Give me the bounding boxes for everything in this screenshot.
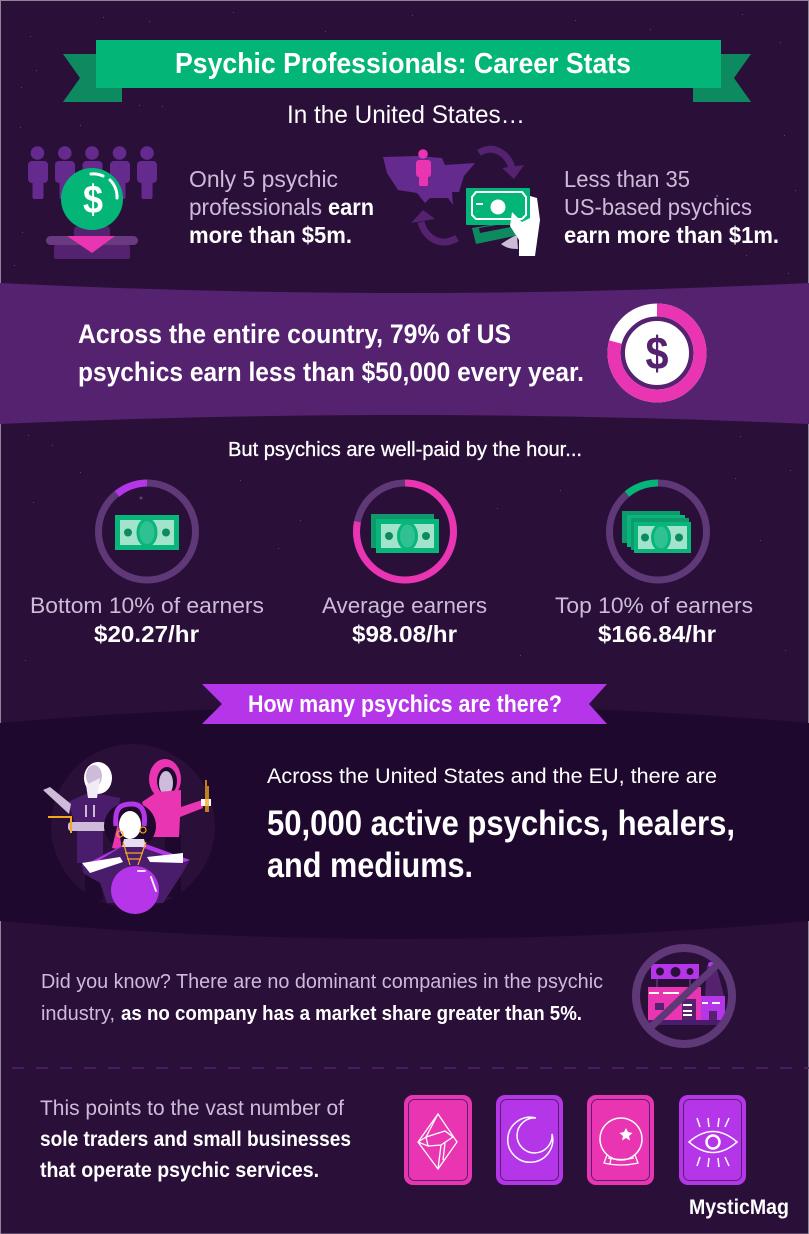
statement: 50,000 active psychics: 50,000 active psychics, healers, <box>267 804 735 843</box>
card: crystal ball <box>587 1095 654 1185</box>
text: only 5 psychic professionals: Only 5 psychic <box>189 166 338 192</box>
text: only 5 psychic professionals: earn <box>328 194 374 220</box>
text: only 5 psychic professionals <box>189 166 374 248</box>
stat: bottom 10 percent: Bottom 10% of earners <box>30 593 264 618</box>
statement: 50,000 active psychics: Across the United States and the EU, there are <box>267 765 717 788</box>
text: only 5 psychic professionals: professionals <box>189 194 322 220</box>
band statement: psychics earn less than $50,000 every year. <box>78 357 584 387</box>
text: less than 35 US-based psychics: earn more than $1m. <box>564 222 779 248</box>
stat: average earners: Average earners <box>322 593 487 618</box>
ring and bill icon <box>98 483 196 580</box>
panel: purple band 79 percent <box>0 283 809 424</box>
icon: five people with crystal ball <box>28 146 157 259</box>
ring and bills icon <box>610 483 706 580</box>
statement: 50,000 active psychics <box>267 765 735 885</box>
text: sole traders and small businesses <box>40 1097 351 1182</box>
text: sole traders and small businesses: that operate psychic services. <box>40 1159 319 1182</box>
title ribbon <box>63 40 751 102</box>
text: only 5 psychic professionals: more than $5m. <box>189 222 352 248</box>
stat: average earners <box>322 483 487 647</box>
logo: MysticMag: MysticMag <box>689 1196 789 1219</box>
stat: top 10 percent <box>555 483 753 647</box>
card: crystal <box>404 1095 472 1185</box>
stat: bottom 10 percent <box>30 483 264 647</box>
text: sole traders and small businesses: This points to the vast number of <box>40 1097 344 1120</box>
icon: crossed-out company building <box>636 948 732 1044</box>
text: less than 35 US-based psychics: US-based psychics <box>564 194 752 220</box>
icon: US map, arrows and money in hand <box>383 149 540 256</box>
icon: donut 79 percent with dollar: $ <box>646 327 668 379</box>
subtitle: In the United States… <box>287 101 525 129</box>
text: less than 35 US-based psychics: Less than 35 <box>564 166 690 192</box>
illustration: three psychics in circle <box>43 744 215 914</box>
ring and bills icon <box>356 483 454 580</box>
text: less than 35 US-based psychics <box>564 166 779 248</box>
ribbon: how many psychics are there: How many psychics are there? <box>248 691 562 718</box>
text: sole traders and small businesses: sole traders and small businesses <box>40 1128 351 1151</box>
text: did you know: Did you know? There are no dominant companies in the psychic <box>41 971 603 993</box>
ribbon: how many psychics are there <box>202 684 607 724</box>
card: moon <box>496 1095 563 1185</box>
stat: average earners: $98.08/hr <box>352 621 457 647</box>
stat: top 10 percent: Top 10% of earners <box>555 593 753 618</box>
band statement: Across the entire country, 79% of US <box>78 319 511 349</box>
card: eye <box>679 1095 746 1185</box>
band statement <box>78 319 584 387</box>
stat: top 10 percent: $166.84/hr <box>598 621 716 647</box>
statement: 50,000 active psychics: and mediums. <box>267 846 473 885</box>
text: did you know: industry, <box>41 1003 115 1025</box>
heading: well-paid by the hour: But psychics are well-paid by the hour... <box>228 439 582 461</box>
text: did you know: as no company has a market share greater than 5%. <box>121 1003 582 1025</box>
text: did you know <box>41 971 603 1025</box>
icon: donut 79 percent with dollar <box>614 310 700 396</box>
stat: bottom 10 percent: $20.27/hr <box>94 621 199 647</box>
panel: how many psychics <box>0 706 809 939</box>
icon: five people with crystal ball: $ <box>83 178 103 222</box>
title ribbon: Psychic Professionals: Career Stats <box>175 48 631 80</box>
